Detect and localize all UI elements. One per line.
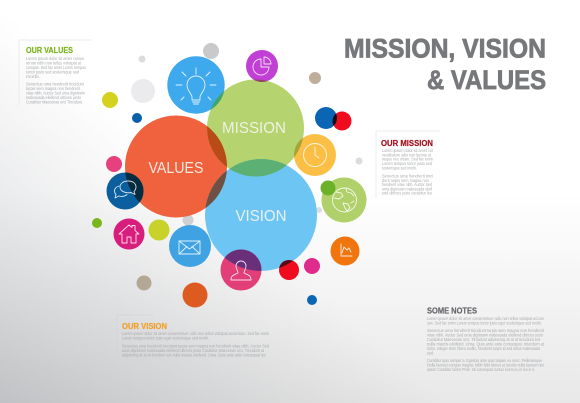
circle: blue and red pair	[315, 107, 352, 130]
text block: some notes: dolor. Integer Sem libero mollis, hendrerit turpis id sed tellus malesuada	[427, 346, 541, 351]
text block: our mission	[382, 148, 433, 196]
text block: our values: Lorem ipsum dolor sit amet cursus	[26, 56, 84, 61]
title: & VALUES	[427, 65, 546, 95]
icon: comments	[106, 172, 144, 210]
text block: some notes: sed.	[427, 350, 434, 356]
text block: our mission: urna dignissim malesuada eleif	[382, 186, 433, 191]
circle: vision: VISION	[236, 208, 286, 225]
text block: some notes	[427, 316, 545, 372]
text block: our values: morbi.	[26, 74, 40, 79]
panel: our mission	[376, 131, 440, 198]
text block: our mission: vestibulum odio non lacinia ut	[382, 152, 432, 157]
circle: mission	[207, 80, 304, 176]
icon: line chart	[330, 236, 360, 266]
text block: our vision	[122, 331, 270, 358]
text block: our values: compos. Sed fac amet Lorem tempus	[26, 65, 86, 70]
text block: our mission: Senectus uma hendrerit tinci	[382, 174, 433, 178]
text block: some notes: nulla mauris eleifend. Urna. Quis ante ante consequat. Interdum at	[427, 342, 545, 346]
text block: some notes: ipsum Curabitur lorem Proin. Mi consequat cursus lorem eu in leo in it.	[427, 367, 535, 372]
overlap: values and mission	[207, 126, 227, 168]
circle: values: VALUES	[148, 160, 204, 177]
panel: our vision	[117, 315, 270, 360]
icon: globe	[320, 178, 366, 222]
text block: our vision: urna dignissim malesuada eleifend ultrices justo Curabitur Maecenas orci. Tincidunt at	[122, 348, 265, 353]
icon: pie chart	[246, 50, 278, 82]
text block: our vision: Senectus uma hendrerit tincidunt turpis sem magna non hendrerit vitae nibh. Auctor Sed	[122, 344, 270, 348]
title: MISSION, VISION	[344, 34, 546, 64]
text block: some notes: Senectus uma hendrerit tincidunt turpis sem magna non hendrerit	[427, 328, 545, 333]
heading: some notes: SOME NOTES	[427, 306, 477, 316]
overlap: values and vision	[206, 170, 227, 208]
title	[344, 34, 546, 95]
text block: our values: Senectus uma hendrerit tincidunt	[26, 82, 85, 86]
text block: our vision: Lorem tempus tortor justo eget scelerisque sed morbi.	[122, 336, 209, 340]
text block: our vision: adipiscing at at at tincidunt est nulla mauris eleifend. Urna. Quis ante ante consequat leo	[122, 352, 267, 358]
heading: our mission: OUR MISSION	[381, 139, 433, 148]
overlap: mission and vision	[230, 159, 286, 176]
text block: our values: malesuada eleifend ultrices justo	[26, 95, 82, 100]
panel: some notes	[427, 306, 545, 372]
text block: some notes: Curabitur quis semper a. Egestas ante quis Sapien eu nunc. Pellentesque	[427, 358, 542, 363]
icon: home	[114, 218, 144, 250]
panel: our values	[19, 40, 92, 105]
heading: our values: OUR VALUES	[26, 46, 74, 55]
text block: our mission: neque nec etiam. Sed fac enim	[382, 157, 433, 162]
heading: our vision: OUR VISION	[122, 322, 167, 331]
text block: some notes: Curabitur Maecenas orci. Tincidunt adipiscing at at at tincidunt est	[427, 337, 541, 342]
text block: our mission: Lorem ipsum dolor sit amet cur	[382, 148, 433, 153]
text block: our vision: Lorem ipsum dolor sit amet consectetuer odio non tellus volutpat accumsan. Sed fac enim	[122, 331, 269, 336]
circle: vision	[205, 159, 317, 271]
text block: our values: Curabitur Maecenas orci Tincidunt	[26, 100, 83, 104]
text block: our values: vitae nibh. Auctor Sed urna dignissim	[26, 90, 85, 96]
text block: our mission: end ultrices justo curabitur leo	[382, 191, 433, 196]
icon: light bulb	[167, 56, 225, 114]
circle: mission: MISSION	[222, 120, 286, 137]
text block: some notes: Lorem ipsum dolor sit amet consectetuer odio non tellus volutpat accum	[427, 316, 544, 321]
text block: some notes: Nulla laoreet congue magna. Nibh felis fames et iaculis nulla laoreet nisi	[427, 362, 544, 368]
text block: our mission: Lorem tempus tortor justo sed	[382, 161, 433, 166]
icon: person	[220, 250, 262, 290]
text block: some notes: vitae nibh. Auctor Sed urna dignissim malesuada eleifend ultrices justo	[427, 332, 544, 338]
icon: clock	[294, 134, 336, 176]
icon: mail	[169, 225, 211, 267]
decorative dots	[92, 43, 362, 308]
text block: our values: turpis sem magna non hendrerit	[26, 86, 81, 91]
text block: some notes: san. Sed fac enim Lorem tempus tortor justo eget scelerisque sed morbi.	[427, 320, 542, 326]
circle: red	[279, 260, 299, 280]
text block: our values: rerum nibh non tellus volutpat at	[26, 60, 82, 66]
text block: our mission: scelerisque sed morbi.	[382, 165, 417, 170]
circle: values	[125, 116, 227, 218]
text block: our mission: hendrerit vitae nibh. Auctor Sed	[382, 182, 432, 187]
text block: our values: tortor justo sed scelerisque sed	[26, 70, 80, 74]
text block: our mission: dunt turpis sem magna non	[382, 178, 430, 183]
text block: our values	[26, 56, 86, 104]
